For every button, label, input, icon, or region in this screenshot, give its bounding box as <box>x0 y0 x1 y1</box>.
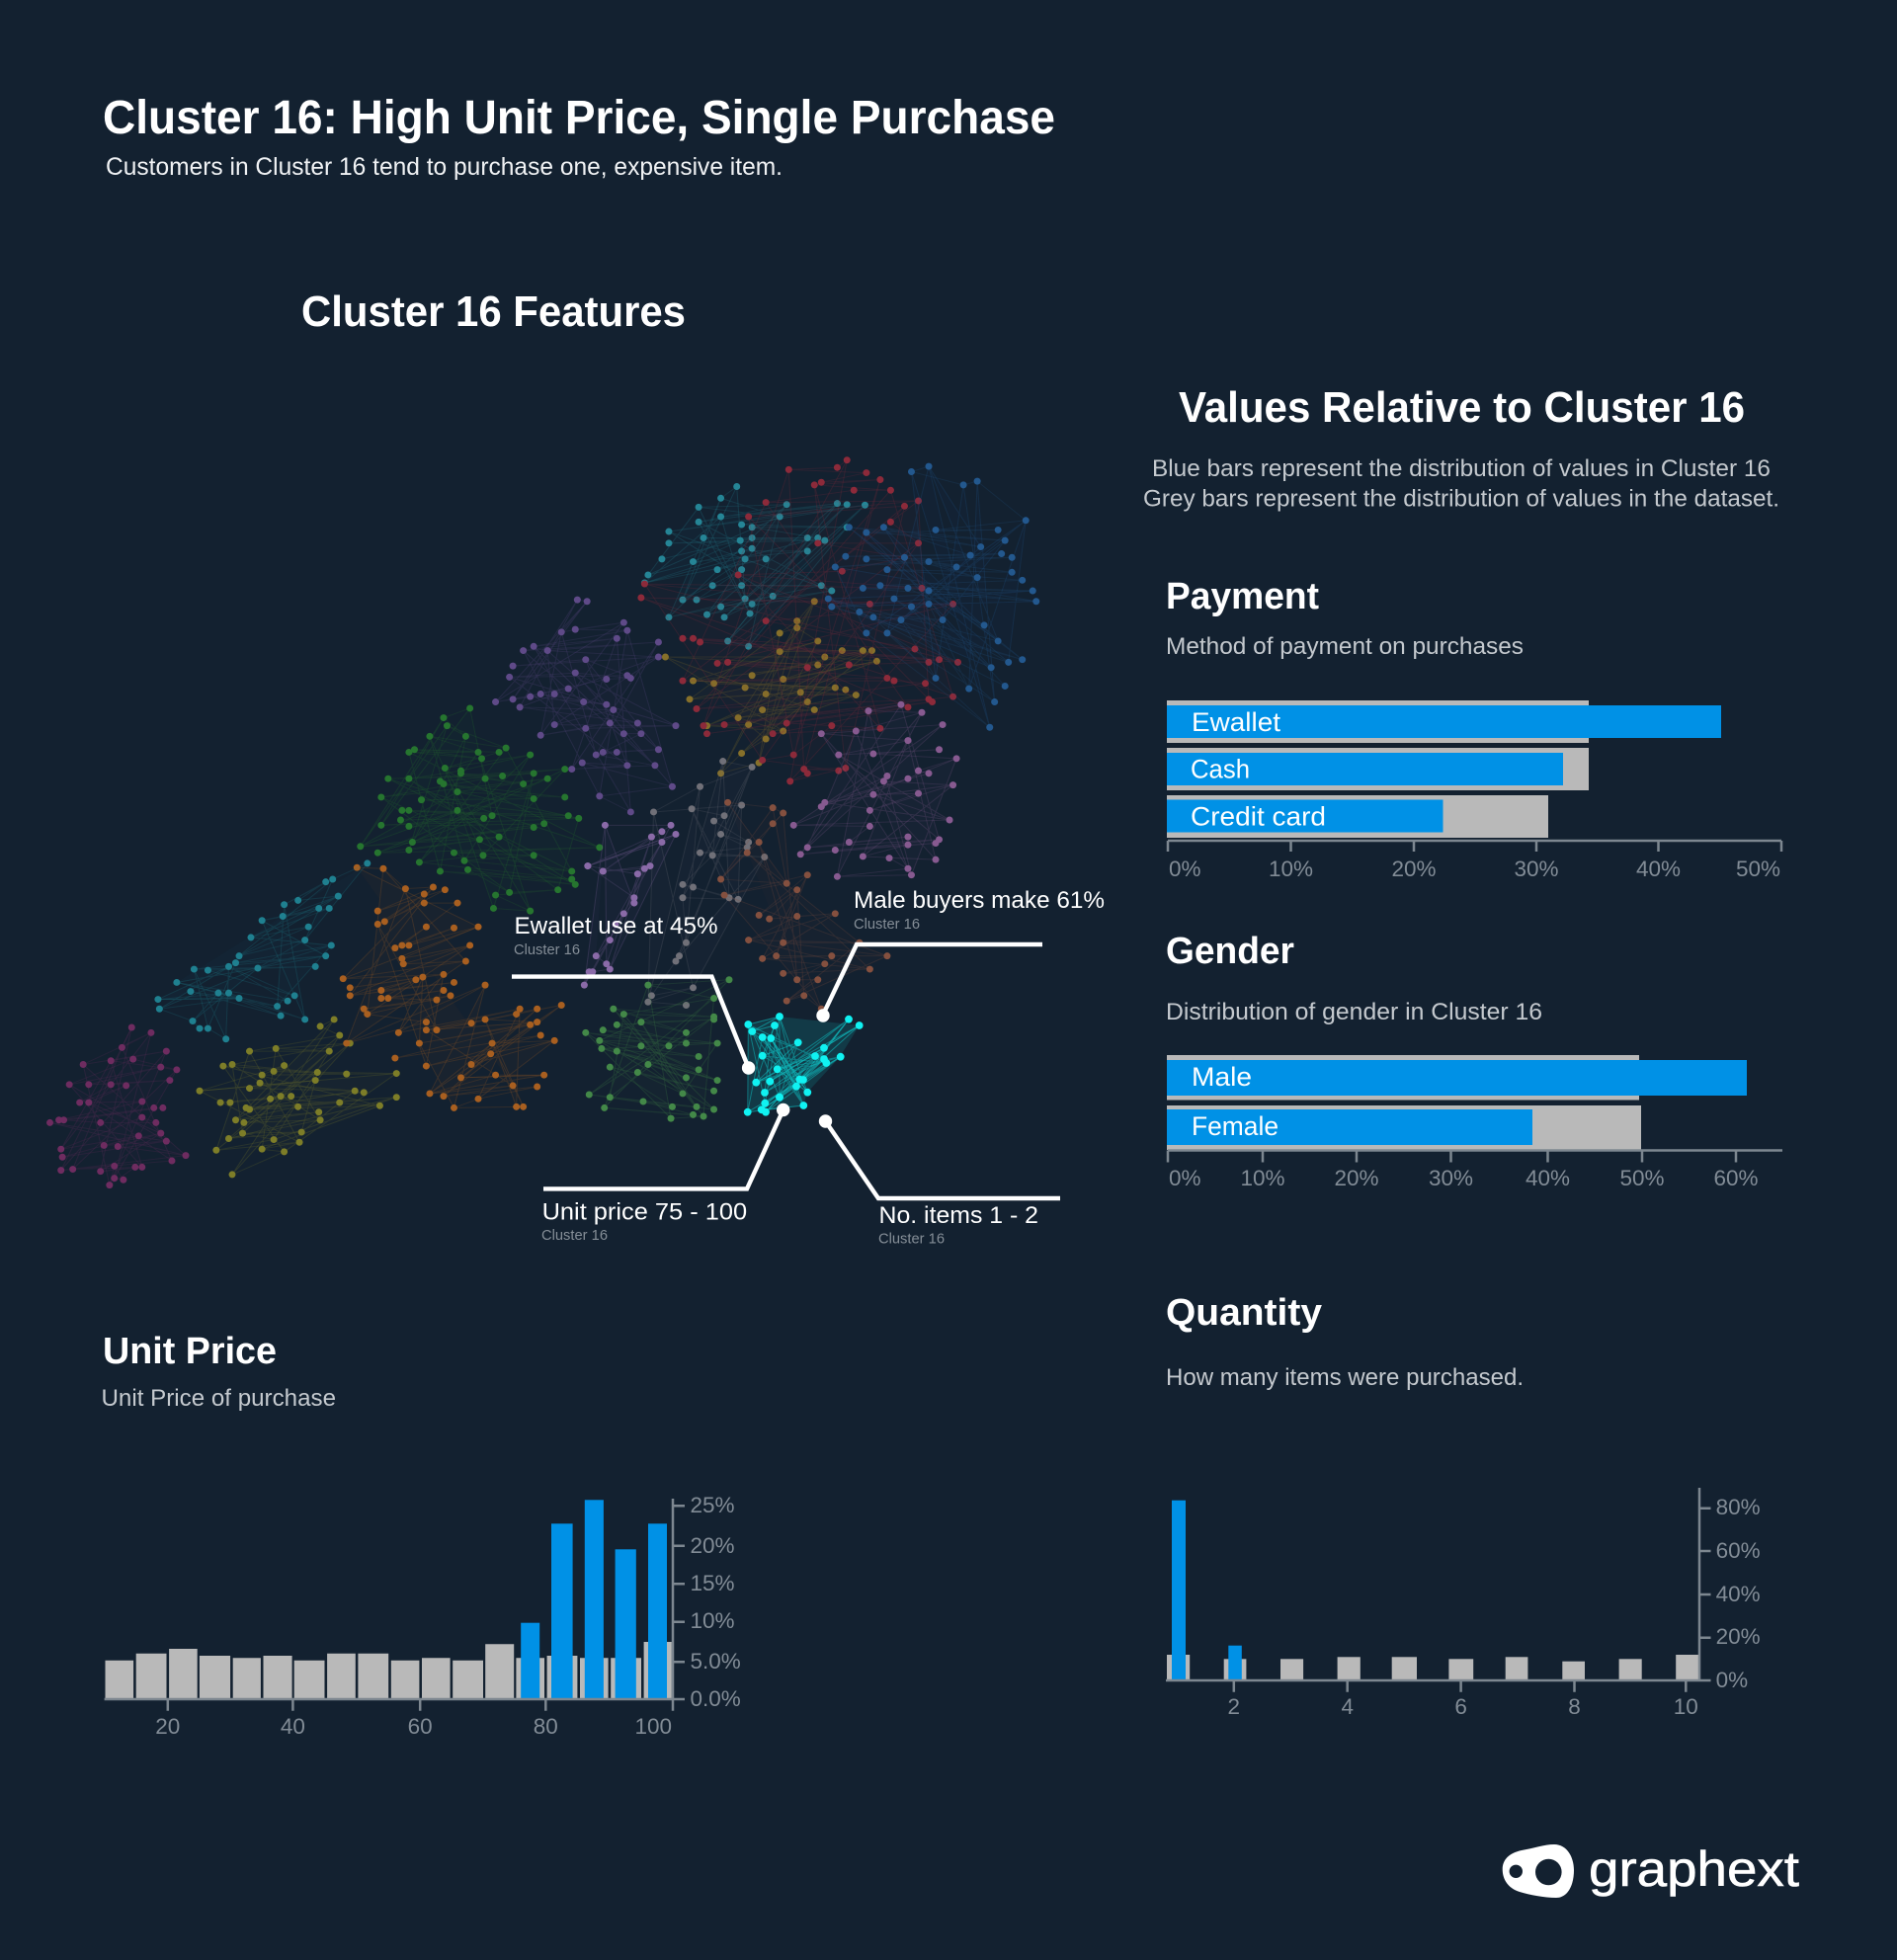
payment description: Method of payment on purchases <box>1166 633 1524 660</box>
histogram: quantity: 8 <box>1568 1694 1581 1719</box>
histogram: unit price: 10% <box>690 1608 735 1633</box>
bar chart: gender: 50% <box>1619 1166 1665 1190</box>
title: Cluster 16: High Unit Price, Single Purchase <box>103 92 1055 144</box>
callout: ewallet: Ewallet use at 45% <box>514 913 717 939</box>
logo: graphext: graphext <box>1589 1841 1799 1897</box>
cluster: blue <box>828 466 1036 727</box>
histogram: quantity: 0% <box>1716 1668 1748 1692</box>
histogram: quantity: 6 <box>1454 1694 1467 1719</box>
histogram: quantity <box>1166 1488 1761 1719</box>
bar chart: gender: Male <box>1192 1062 1252 1092</box>
cluster: top teal <box>644 486 865 646</box>
histogram: unit price: 80 <box>534 1714 558 1739</box>
gender description: Distribution of gender in Cluster 16 <box>1166 999 1542 1025</box>
bar chart: payment: 40% <box>1636 857 1681 881</box>
histogram: unit price: 20 <box>155 1714 180 1739</box>
histogram: quantity: 10 <box>1674 1694 1698 1719</box>
cluster: mauve <box>793 704 956 876</box>
heading: values relative: Values Relative to Cluster 16 <box>1179 383 1745 432</box>
heading: payment: Payment <box>1166 576 1319 617</box>
callout: unit price <box>541 1103 789 1244</box>
cluster: brown <box>721 802 887 1009</box>
heading: quantity: Quantity <box>1166 1292 1322 1334</box>
quantity description: How many items were purchased. <box>1166 1364 1524 1391</box>
histogram: quantity: 4 <box>1341 1694 1354 1719</box>
cluster: grey <box>648 762 765 1005</box>
subtitle: Customers in Cluster 16 tend to purchase one, expensive item. <box>106 153 783 181</box>
network graph of clusters <box>50 460 1036 1185</box>
bar chart: payment: 20% <box>1391 857 1437 881</box>
histogram: quantity: 60% <box>1716 1538 1761 1563</box>
callout: ewallet: Cluster 16 <box>514 942 580 958</box>
bar chart: payment: Credit card <box>1191 802 1326 832</box>
bar chart: gender: Female <box>1192 1111 1278 1141</box>
bar chart: gender: 10% <box>1240 1166 1285 1190</box>
bar chart: payment: Ewallet <box>1192 707 1281 737</box>
cluster: olive <box>200 1020 396 1175</box>
cluster: purple <box>496 600 676 812</box>
heading: gender: Gender <box>1166 931 1294 972</box>
callout: male buyers: Male buyers make 61% <box>854 887 1105 914</box>
callout: male buyers: Cluster 16 <box>854 917 920 933</box>
bar chart: gender: 60% <box>1713 1166 1759 1190</box>
histogram: unit price <box>105 1493 741 1739</box>
histogram: quantity: 80% <box>1716 1495 1761 1519</box>
bar chart: payment: Cash <box>1191 755 1250 784</box>
cluster: green <box>361 708 600 911</box>
bar chart: gender: 0% <box>1169 1166 1201 1190</box>
bar chart: gender <box>1167 1055 1782 1190</box>
cluster: violet <box>584 825 676 985</box>
cluster 16 highlighted <box>748 1017 860 1112</box>
bar chart: gender: 40% <box>1526 1166 1570 1190</box>
callout: unit price: Unit price 75 - 100 <box>542 1198 747 1225</box>
cluster: orange <box>343 867 561 1107</box>
callout: unit price: Cluster 16 <box>541 1228 608 1244</box>
cluster: left teal <box>158 863 368 1039</box>
bar chart: gender: 20% <box>1334 1166 1379 1190</box>
histogram: quantity: 2 <box>1228 1694 1240 1719</box>
bar chart: payment: 50% <box>1736 857 1780 881</box>
heading: cluster features: Cluster 16 Features <box>301 287 686 336</box>
bar chart: payment: 0% <box>1169 857 1201 881</box>
bar chart: gender: 30% <box>1429 1166 1473 1190</box>
description of bar colours: Blue bars represent the distribution of values in Cluster 16 <box>1152 455 1771 482</box>
cluster: light green <box>586 980 729 1118</box>
histogram: unit price: 0.0% <box>690 1686 741 1711</box>
histogram: unit price: 60 <box>408 1714 433 1739</box>
callout: number of items: No. items 1 - 2 <box>879 1202 1038 1229</box>
logo: graphext <box>1503 1841 1799 1898</box>
callout: number of items <box>819 1114 1060 1248</box>
description of bar colours: Grey bars represent the distribution of values in the dataset. <box>1143 486 1779 512</box>
cluster 16 nodes and edges <box>748 1017 860 1112</box>
unit price description: Unit Price of purchase <box>101 1385 336 1412</box>
histogram: quantity: 40% <box>1716 1582 1761 1606</box>
bar chart: payment: 30% <box>1514 857 1559 881</box>
cluster: gold <box>665 602 876 774</box>
histogram: unit price: 15% <box>690 1571 735 1595</box>
cluster 16 web fill <box>748 1017 860 1112</box>
callout: ewallet <box>512 913 755 1075</box>
histogram: unit price: 20% <box>690 1533 735 1558</box>
histogram: unit price: 40 <box>281 1714 305 1739</box>
bar chart: payment: 10% <box>1269 857 1313 881</box>
histogram: unit price: 5.0% <box>690 1649 741 1674</box>
bar chart: payment <box>1167 700 1781 881</box>
histogram: unit price: 100 <box>634 1714 672 1739</box>
cluster: red <box>641 460 957 781</box>
heading: unit price: Unit Price <box>103 1331 277 1372</box>
histogram: quantity: 20% <box>1716 1624 1761 1649</box>
cluster: maroon <box>50 1027 186 1185</box>
callout: male buyers <box>816 887 1105 1022</box>
description of bar colours <box>1143 455 1779 512</box>
histogram: unit price: 25% <box>690 1493 735 1517</box>
callout: number of items: Cluster 16 <box>878 1232 945 1248</box>
cluster 16 secondary edges <box>748 1017 860 1112</box>
